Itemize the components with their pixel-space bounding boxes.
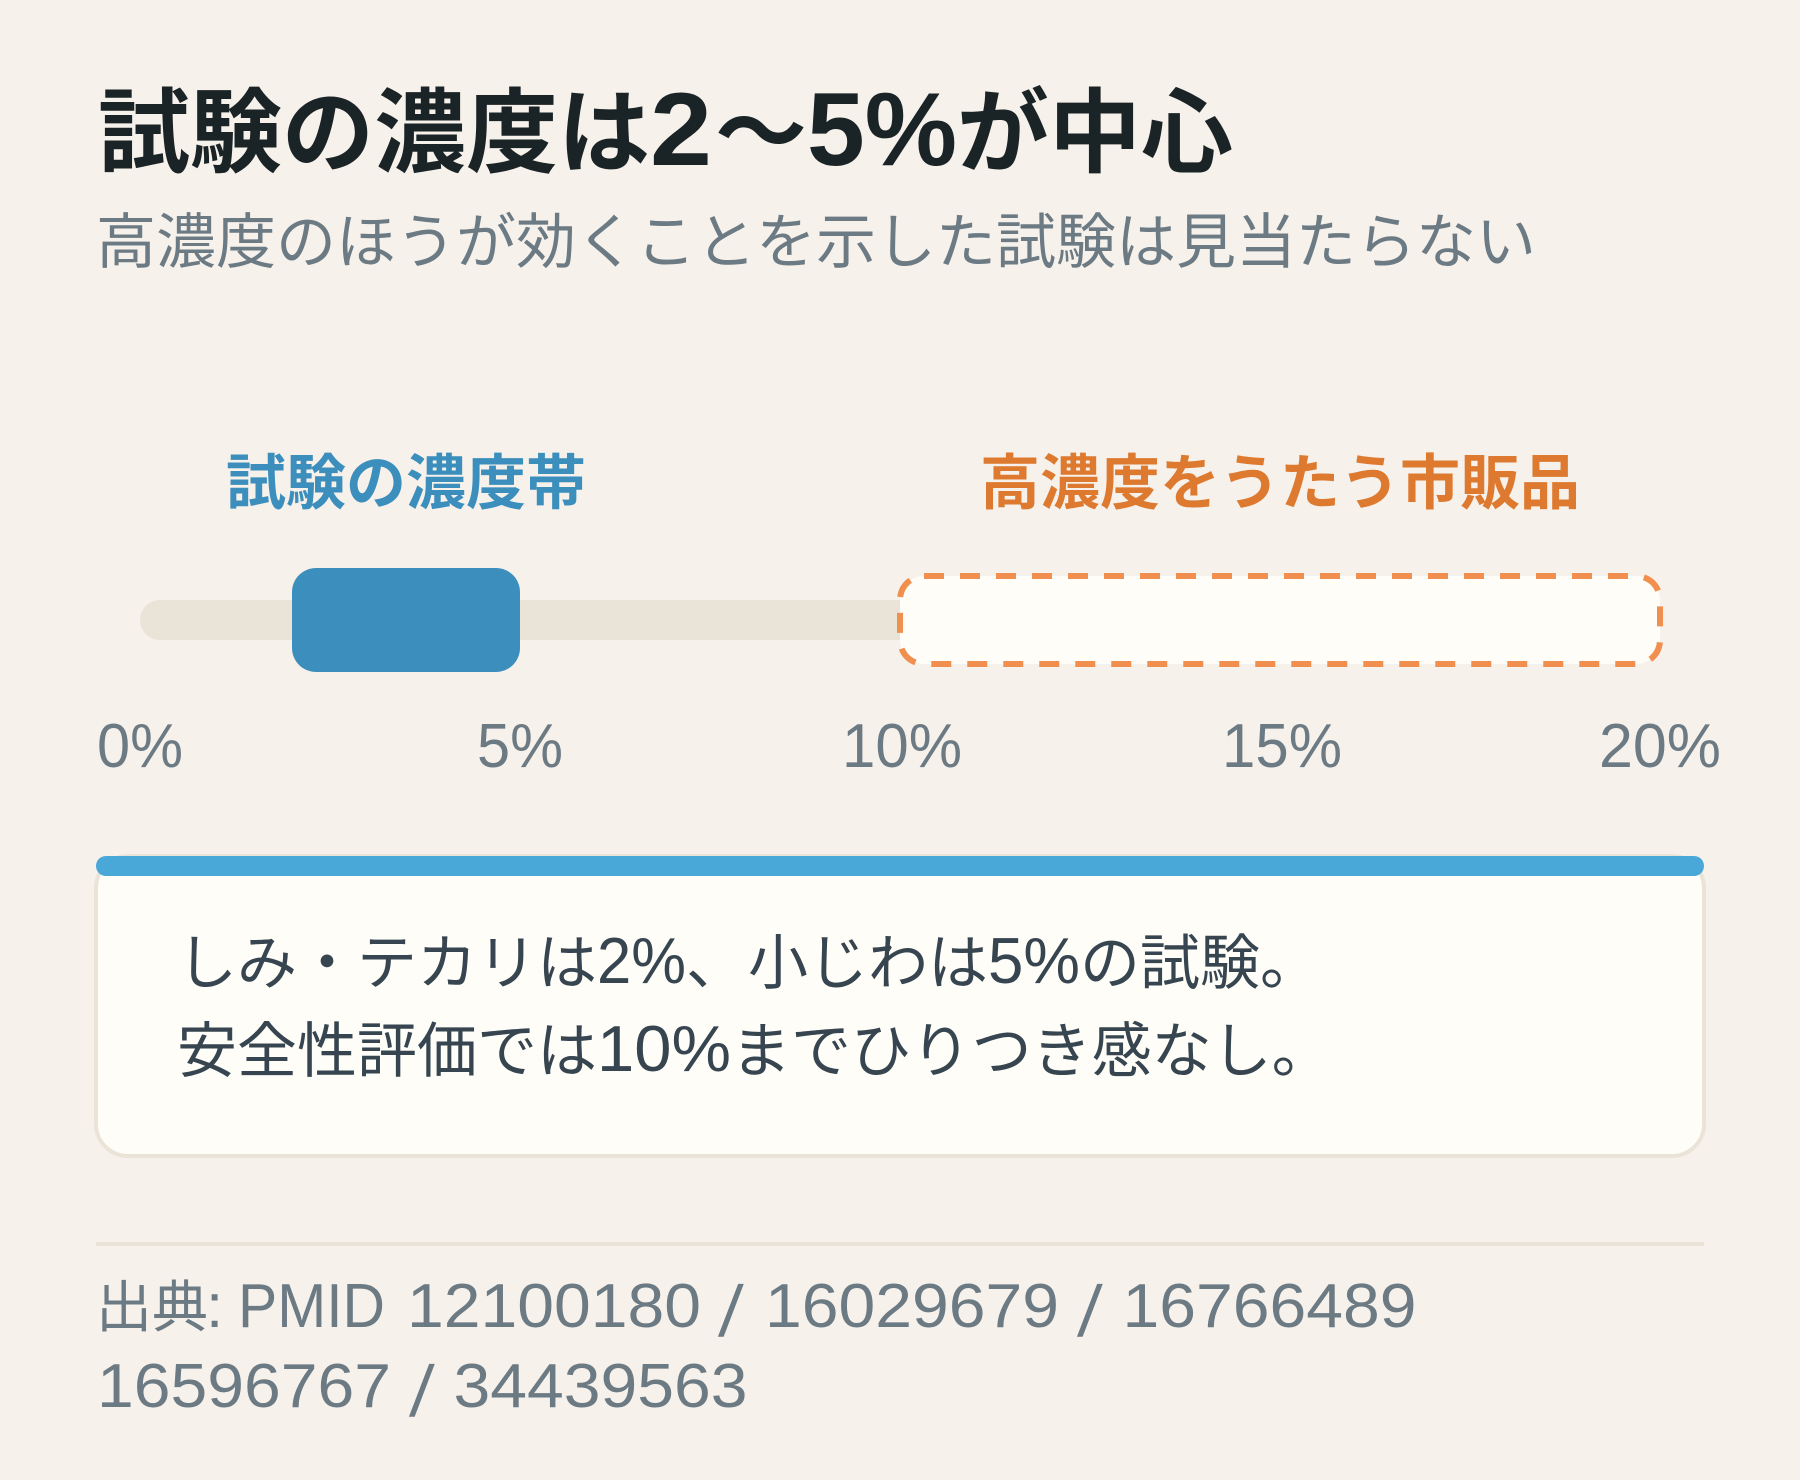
sources: /: [407, 1352, 437, 1432]
concentration scale chart: [97, 568, 1721, 781]
tick labels: 0%: [97, 712, 183, 781]
card text: 2%: [597, 924, 686, 997]
sources: /: [1075, 1272, 1105, 1352]
tick labels: 15%: [1222, 712, 1342, 781]
label: trial concentration band: 試験の濃度帯: [226, 450, 586, 517]
sources: [96, 1272, 1416, 1432]
label: high concentration products: 高濃度をうたう市販品: [980, 450, 1580, 517]
callout card: [96, 856, 1704, 1156]
footer divider: [96, 1242, 1704, 1246]
trial range bar 2–5%: [292, 568, 520, 672]
card text: 安全性評価では: [177, 1018, 597, 1085]
title: 5%: [807, 72, 957, 188]
sources: 12100180: [407, 1272, 701, 1341]
sources: 出典: [96, 1276, 208, 1339]
title: 〜: [715, 83, 807, 185]
card text: 5%: [988, 924, 1080, 997]
title: 2: [650, 72, 712, 188]
tick labels: 20%: [1599, 712, 1721, 781]
subtitle: 高濃度のほうが効くことを示した試験は見当たらない: [96, 209, 1536, 276]
tick labels: 10%: [842, 712, 962, 781]
card text: 10%: [597, 1012, 731, 1085]
card text: までひりつき感なし。: [731, 1018, 1332, 1085]
scale track: [140, 600, 930, 640]
sources: /: [716, 1272, 746, 1352]
card text: の試験。: [1080, 930, 1320, 997]
title: [98, 72, 1233, 188]
sources: :: [206, 1272, 223, 1341]
sources: 16766489: [1122, 1272, 1416, 1341]
card text: 小じわは: [748, 930, 988, 997]
card text: 、: [686, 930, 746, 997]
card text: [177, 924, 1332, 1085]
tick labels: [97, 712, 1721, 781]
sources: 16029679: [765, 1272, 1059, 1341]
tick labels: 5%: [477, 712, 563, 781]
title: が中心: [957, 83, 1233, 185]
sources: 34439563: [454, 1352, 748, 1421]
card top accent bar: [96, 856, 1704, 876]
card text: しみ・テカリは: [177, 930, 597, 997]
sources: PMID: [238, 1272, 385, 1341]
title: 試験の濃度は: [98, 83, 650, 185]
sources: 16596767: [97, 1352, 391, 1421]
card body: [96, 856, 1704, 1156]
commercial range dashed box 10–20%: [900, 576, 1660, 664]
